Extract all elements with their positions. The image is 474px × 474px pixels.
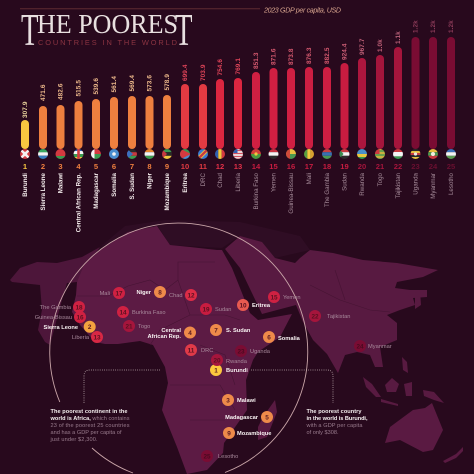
column 23 Uganda: 23 [411, 162, 420, 171]
column 19 Sudan: Sudan [342, 172, 349, 191]
column 21 Togo: 1.0k [377, 39, 384, 52]
column 18 The Gambia: The Gambia [324, 172, 331, 207]
column 14 Burkina Faso: Burkina Faso [253, 172, 260, 209]
marker Yemen [268, 291, 300, 303]
marker Uganda [235, 345, 271, 357]
marker DRC: DRC [201, 348, 213, 354]
marker Sierra Leone: Sierra Leone [44, 325, 78, 331]
column 2 Sierra Leone: Sierra Leone [40, 172, 47, 210]
header rule [20, 8, 260, 10]
column 10 Eritrea: 10 [181, 162, 189, 171]
column 3 Malawi: Malawi [58, 173, 65, 193]
land: Australia [385, 403, 443, 452]
marker Mozambique: 9 [227, 430, 231, 437]
land: Asia [225, 236, 438, 373]
marker S. Sudan: 7 [214, 327, 218, 334]
column 17 Mali [304, 48, 314, 184]
column 24 Myanmar: 24 [429, 162, 438, 171]
column 20 Rwanda [357, 38, 367, 196]
marker The Gambia: 18 [75, 304, 83, 311]
column 6 Somalia [109, 76, 119, 197]
marker Madagascar [225, 411, 273, 423]
column 19 Sudan: 924.4 [342, 43, 349, 60]
column 12 Chad: 754.6 [217, 59, 224, 76]
column 10 Eritrea [180, 64, 190, 192]
column 2 Sierra Leone: 2 [41, 162, 45, 171]
column 16 Guinea-Bissau: 873.8 [288, 48, 295, 65]
column 9 Mozambique: Mozambique [164, 172, 171, 210]
highlight circle [50, 223, 308, 472]
marker Tajikistan: Tajikistan [327, 314, 350, 320]
marker Somalia: 6 [267, 334, 271, 341]
column 22 Tajikistan: Tajikistan [395, 172, 402, 198]
marker Burundi: 1 [214, 367, 218, 374]
subtitle: COUNTRIES IN THE WORLD [38, 38, 177, 47]
callout: poorest continent: The poorest continent in the [50, 409, 128, 415]
column 13 Liberia: 769.1 [235, 58, 242, 74]
column 6 Somalia: 561.4 [111, 76, 118, 92]
column 5 Madagascar: 5 [94, 162, 99, 171]
callout connector right [251, 370, 333, 403]
marker DRC [185, 344, 213, 356]
column 8 Niger: 573.6 [147, 75, 154, 92]
marker Burundi [210, 364, 248, 376]
marker Sierra Leone: 2 [88, 324, 92, 331]
column 7 S. Sudan: 569.4 [129, 75, 136, 92]
column 20 Rwanda: Rwanda [359, 172, 366, 196]
marker Sudan [200, 303, 231, 315]
marker Chad: 12 [187, 292, 195, 299]
column 18 The Gambia: 18 [323, 162, 331, 171]
marker DRC: 11 [188, 347, 195, 354]
column 15 Yemen: 15 [269, 162, 278, 171]
column 1 Burundi: Burundi [22, 173, 29, 197]
marker Rwanda: 20 [213, 357, 221, 364]
column 21 Togo: 21 [376, 162, 385, 171]
column 22 Tajikistan [393, 32, 403, 198]
column 2 Sierra Leone: 471.6 [40, 84, 47, 101]
title: T [21, 5, 38, 55]
column 11 DRC: DRC [200, 172, 207, 186]
marker Myanmar: Myanmar [368, 344, 392, 350]
column 21 Togo: Togo [377, 172, 384, 186]
column 16 Guinea-Bissau: 16 [287, 162, 295, 171]
marker Yemen: Yemen [283, 295, 300, 301]
marker Madagascar: 5 [265, 414, 269, 421]
marker Liberia [72, 331, 103, 343]
column 14 Burkina Faso [251, 52, 261, 209]
marker Guinea-Bissau [35, 311, 86, 323]
column 23 Uganda [410, 20, 420, 194]
column 9 Mozambique: 578.9 [164, 74, 171, 90]
marker Myanmar: 24 [356, 343, 364, 350]
marker Burkina Faso: 14 [119, 309, 127, 316]
column 14 Burkina Faso: 851.3 [253, 52, 260, 69]
column 8 Niger: Niger [147, 172, 154, 189]
marker Myanmar [354, 340, 392, 352]
marker Burkina Faso: Burkina Faso [132, 310, 166, 316]
column 14 Burkina Faso: 14 [252, 162, 261, 171]
map markers and labels [35, 286, 392, 462]
column 4 Central African Rep.: 515.5 [76, 80, 83, 96]
marker Madagascar: Madagascar [225, 415, 259, 421]
column 6 Somalia: 6 [112, 162, 116, 171]
marker Central African Rep.: African Rep. [147, 334, 181, 340]
marker Niger [136, 286, 166, 298]
column 11 DRC: 11 [199, 162, 208, 171]
column 15 Yemen: 871.6 [271, 48, 278, 65]
marker Mali: 17 [115, 290, 123, 297]
marker Togo [123, 320, 150, 332]
column 15 Yemen: Yemen [271, 172, 278, 192]
column 3 Malawi: 3 [58, 162, 63, 171]
land: western landmass [10, 247, 100, 345]
marker Rwanda [211, 354, 248, 366]
marker Lesotho: 25 [203, 453, 211, 460]
callout: poorest continent: just under $2,300. [50, 437, 98, 443]
marker Mali [100, 287, 125, 299]
column 1 Burundi: 1 [23, 162, 28, 171]
highlight circle lower left [92, 448, 133, 473]
marker Sudan: Sudan [215, 307, 231, 313]
column 24 Myanmar [428, 20, 438, 198]
callout: poorest country: of only $308. [306, 430, 339, 436]
marker Guinea-Bissau: Guinea-Bissau [35, 315, 72, 321]
land: New Zealand [443, 447, 463, 463]
column 22 Tajikistan: 1.1k [395, 31, 402, 44]
column 13 Liberia: 13 [234, 162, 242, 171]
column 25 Lesotho: Lesotho [448, 172, 455, 195]
marker Togo: 21 [125, 323, 133, 330]
marker The Gambia: The Gambia [40, 305, 72, 311]
marker Eritrea: Eritrea [252, 303, 271, 309]
column 13 Liberia: Liberia [235, 172, 242, 192]
marker Liberia: 13 [93, 334, 101, 341]
world map [10, 220, 463, 474]
marker Uganda: 23 [237, 348, 245, 355]
title [21, 5, 192, 55]
column 9 Mozambique: 9 [165, 162, 169, 171]
callout connector left [84, 370, 160, 403]
column 11 DRC: 703.9 [200, 64, 207, 81]
land: Africa [72, 226, 292, 474]
column 4 Central African Rep.: Central African Rep. [76, 173, 83, 232]
marker Rwanda: Rwanda [226, 359, 248, 365]
column 10 Eritrea: Eritrea [182, 172, 189, 193]
column 3 Malawi: 482.6 [58, 83, 65, 100]
marker Sierra Leone [44, 321, 96, 333]
marker Lesotho: Lesotho [218, 454, 238, 460]
marker Uganda: Uganda [250, 349, 271, 355]
marker S. Sudan: S. Sudan [226, 328, 251, 334]
marker Chad: Chad [169, 293, 183, 299]
marker Central African Rep. [147, 326, 196, 340]
marker Malawi: Malawi [237, 398, 256, 404]
marker Central African Rep.: 4 [188, 330, 192, 337]
marker Eritrea [237, 299, 271, 311]
column 19 Sudan [340, 44, 350, 190]
column 17 Mali: 17 [305, 162, 313, 171]
marker Guinea-Bissau: 16 [76, 314, 84, 321]
marker Central African Rep.: Central [161, 328, 181, 334]
marker Tajikistan: 22 [311, 313, 319, 320]
column 20 Rwanda: 967.7 [359, 38, 366, 55]
title: HE POORES [37, 9, 178, 39]
column 12 Chad: Chad [217, 172, 224, 188]
marker Malawi: 3 [226, 397, 230, 404]
marker Yemen: 15 [270, 294, 278, 301]
column 17 Mali: Mali [306, 173, 313, 184]
column 25 Lesotho: 1.2k [448, 20, 455, 33]
column 2 Sierra Leone [38, 84, 48, 210]
column 21 Togo [375, 40, 385, 186]
marker Chad [169, 289, 197, 301]
column 23 Uganda: 1.2k [413, 20, 420, 33]
column 23 Uganda: Uganda [413, 172, 420, 195]
column 10 Eritrea: 699.4 [182, 64, 189, 81]
column 12 Chad: 12 [216, 162, 224, 171]
marker Mozambique: Mozambique [237, 431, 271, 437]
marker Sudan: 19 [202, 306, 210, 313]
column 8 Niger: 8 [147, 162, 152, 171]
column 1 Burundi: 307.9 [22, 101, 29, 118]
column 3 Malawi [56, 84, 66, 193]
column 7 S. Sudan: 7 [130, 162, 134, 171]
column 17 Mali: 876.3 [306, 47, 313, 64]
callout: poorest continent: world is Africa, which contains [50, 416, 130, 422]
column 15 Yemen [268, 48, 278, 192]
marker Lesotho [201, 450, 238, 462]
column 22 Tajikistan: 22 [394, 162, 402, 171]
column 4 Central African Rep. [74, 80, 84, 232]
column 24 Myanmar: 1.2k [430, 20, 437, 33]
country borders [77, 262, 390, 420]
marker Niger: 8 [158, 289, 162, 296]
callout: poorest continent [50, 409, 130, 443]
callout: poorest continent: 23 of the poorest 25 countries [50, 423, 130, 429]
marker Burundi: Burundi [226, 368, 248, 374]
column 5 Madagascar: 539.6 [93, 78, 100, 94]
column 4 Central African Rep.: 4 [76, 162, 81, 171]
axis caption: 2023 GDP per capita, USD [263, 6, 341, 14]
column 16 Guinea-Bissau: Guinea-Bissau [288, 172, 295, 214]
land: Southeast Asia islands [363, 290, 444, 406]
column 18 The Gambia [322, 48, 332, 207]
marker Malawi [222, 394, 256, 406]
column 20 Rwanda: 20 [358, 162, 366, 171]
callout: poorest country: in the world is Burundi, [306, 416, 368, 422]
callout: poorest continent: and has a GDP per capita of [50, 430, 122, 436]
marker Burkina Faso [117, 306, 166, 318]
column 11 DRC [198, 64, 208, 186]
column 24 Myanmar: Myanmar [430, 173, 437, 199]
marker Somalia: Somalia [278, 336, 301, 342]
column 8 Niger [144, 75, 154, 188]
callout: poorest country [306, 409, 368, 436]
column 25 Lesotho [446, 20, 456, 194]
column 7 S. Sudan: S. Sudan [129, 173, 136, 199]
marker Mozambique [223, 427, 271, 439]
marker Niger: Niger [136, 290, 152, 296]
marker S. Sudan [210, 324, 251, 336]
column 12 Chad [215, 59, 225, 188]
marker Eritrea: 10 [239, 302, 247, 309]
column 9 Mozambique [162, 74, 172, 210]
callout: poorest country: The poorest country [306, 409, 362, 415]
land: faint Europe [100, 220, 310, 258]
marker Mali: Mali [100, 291, 110, 297]
land: Madagascar [258, 400, 277, 440]
column 6 Somalia: Somalia [111, 172, 118, 197]
column 16 Guinea-Bissau [286, 48, 296, 214]
column 19 Sudan: 19 [340, 162, 349, 171]
bar chart [19, 20, 457, 232]
marker Somalia [263, 331, 301, 343]
marker Tajikistan [309, 310, 350, 322]
column 13 Liberia [233, 58, 243, 192]
marker The Gambia [40, 301, 85, 313]
column 18 The Gambia: 882.5 [324, 47, 331, 64]
column 7 S. Sudan [127, 75, 137, 200]
column 5 Madagascar [91, 78, 101, 208]
column 1 Burundi [20, 102, 30, 196]
column 5 Madagascar: Madagascar [93, 172, 100, 209]
callout: poorest country: with a GDP per capita [306, 423, 363, 429]
marker Togo: Togo [138, 324, 150, 330]
title: T [175, 5, 192, 55]
column 25 Lesotho: 25 [447, 162, 456, 171]
marker Liberia: Liberia [72, 335, 90, 341]
